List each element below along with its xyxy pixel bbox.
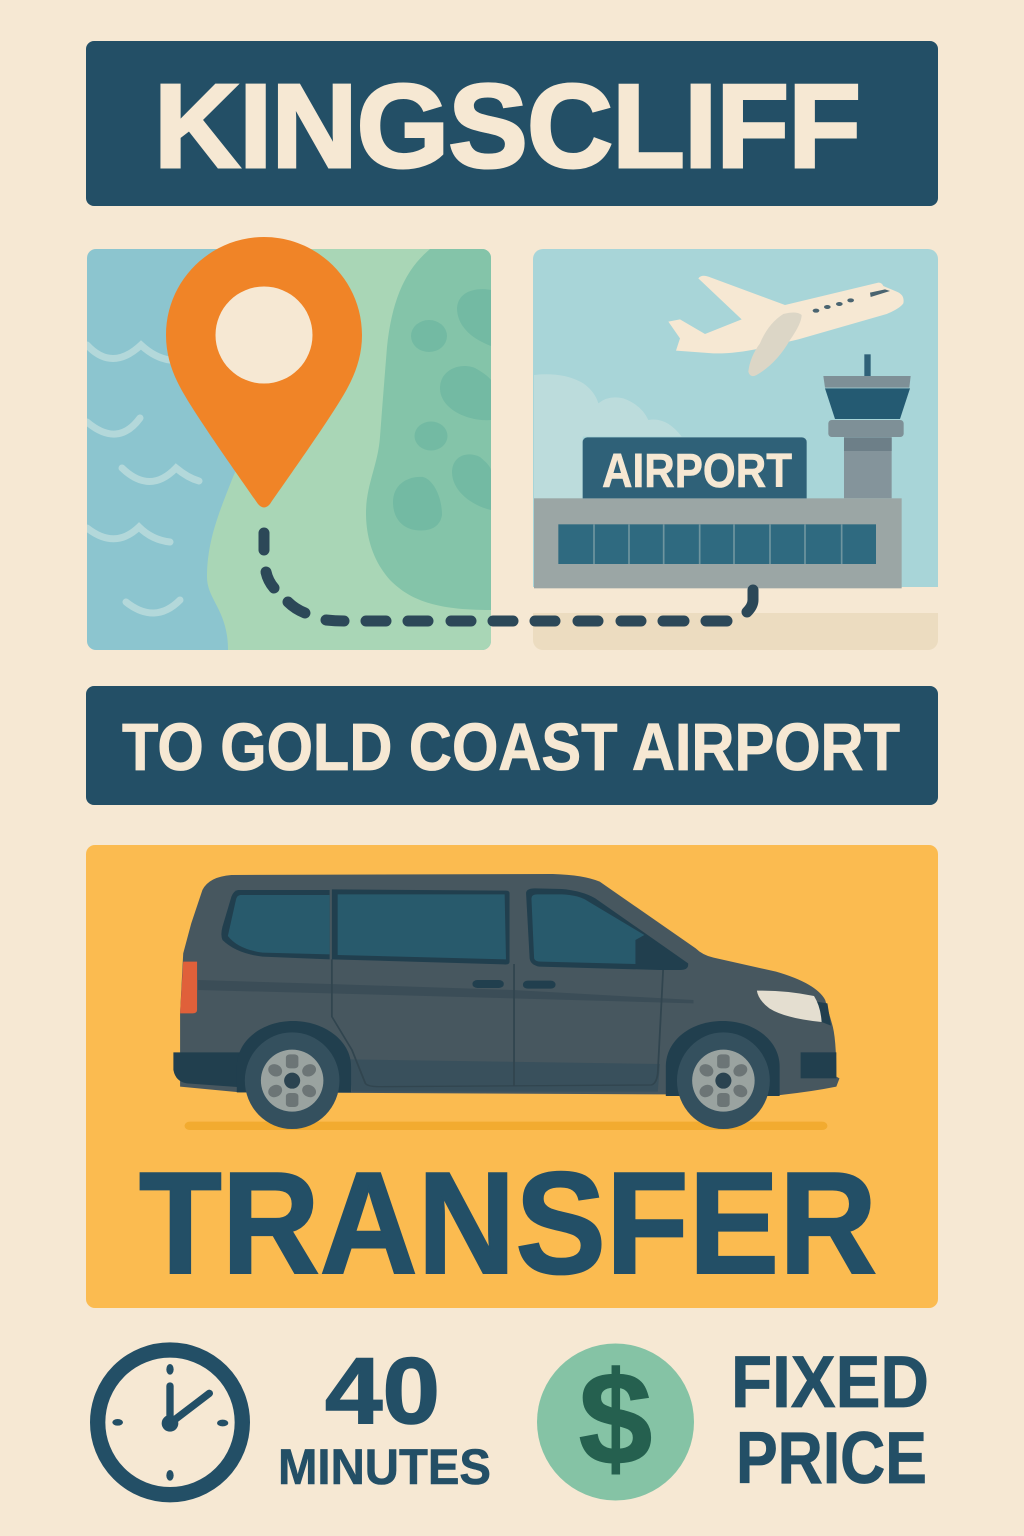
- duration: 40 minutes: 40: [325, 1338, 440, 1443]
- icon: clock: [98, 1350, 242, 1495]
- rear bumper: [173, 1052, 243, 1087]
- body: [180, 874, 839, 1095]
- sky: [533, 249, 938, 587]
- wheel arches: [237, 1021, 351, 1092]
- icon: dollar coin: $: [579, 1345, 652, 1492]
- van: [173, 874, 839, 1130]
- airport sign label: AIRPORT: [602, 445, 792, 498]
- front wheel: [677, 1032, 770, 1129]
- terminal building: [534, 498, 902, 588]
- dashed route arrow: [264, 533, 753, 621]
- headlight: [816, 1002, 831, 1026]
- forest patches: [393, 289, 491, 530]
- door lines: [332, 959, 663, 1087]
- title banner: Kingscliff: KINGSCLIFF: [154, 60, 861, 193]
- fixed price label: [731, 1342, 929, 1499]
- duration: 40 minutes: MINUTES: [278, 1439, 491, 1495]
- map pin: [166, 237, 362, 508]
- subtitle banner: to Gold Coast Airport: TO GOLD COAST AIRPORT: [122, 710, 900, 785]
- ground shadow: [185, 1122, 827, 1130]
- fixed price label: FIXED: [731, 1342, 929, 1423]
- cloud: [534, 374, 682, 498]
- title banner: Kingscliff: [86, 41, 938, 206]
- waves: [87, 345, 199, 613]
- subtitle banner: to Gold Coast Airport: [86, 686, 938, 805]
- airplane: [668, 276, 904, 376]
- door handles: [473, 980, 504, 988]
- panel: airport scene: [533, 249, 938, 650]
- airport sign: [583, 437, 807, 498]
- duration: 40 minutes: [278, 1338, 491, 1495]
- icon: dollar coin: [537, 1344, 694, 1500]
- forest: [366, 249, 491, 610]
- transfer heading: TRANSFER: [139, 1142, 877, 1304]
- fixed price label: PRICE: [736, 1418, 927, 1499]
- taillight: [180, 962, 197, 1013]
- land: [207, 249, 491, 650]
- body stripe: [198, 980, 693, 1003]
- control tower: [823, 354, 911, 498]
- panel: transfer: [86, 845, 938, 1308]
- sill: [348, 1059, 660, 1092]
- windows: [221, 890, 330, 959]
- panel: coastal map: [87, 249, 491, 650]
- ground: [533, 613, 938, 650]
- front vent: [801, 1052, 836, 1078]
- rear wheel: [245, 1032, 339, 1129]
